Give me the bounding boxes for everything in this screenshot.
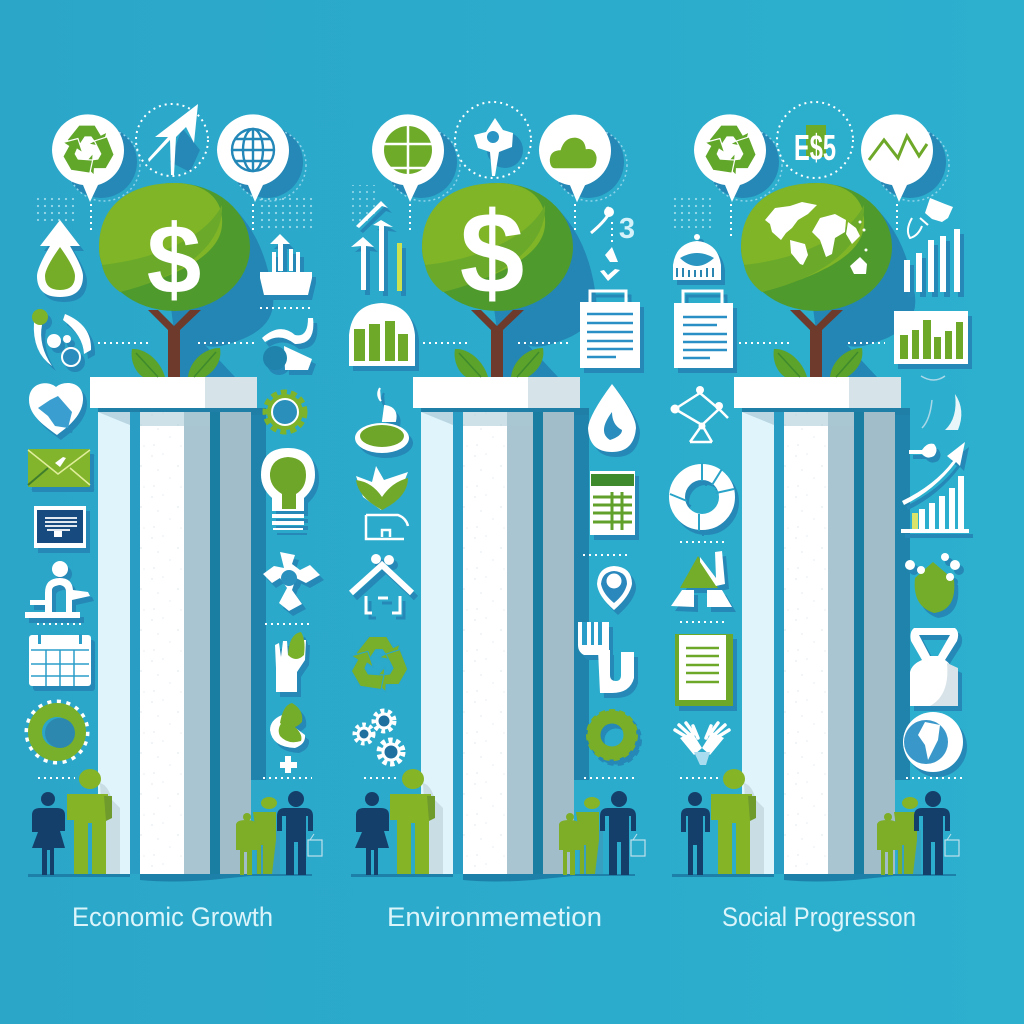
dotted texture xyxy=(352,185,378,225)
icon: dollar sign large: $ xyxy=(460,188,524,318)
icon: bars on tray xyxy=(260,234,312,295)
tree: economic growth xyxy=(99,183,273,377)
icon: recycle bubble xyxy=(694,114,766,202)
icon: document xyxy=(675,634,733,706)
icon: arrow in dashed circle xyxy=(136,104,208,176)
tree: environment xyxy=(422,183,596,377)
icon: person at desk xyxy=(25,561,90,618)
icon: heart globe xyxy=(29,383,83,435)
icon: recycle bubble xyxy=(52,114,124,202)
icon: donut segments xyxy=(670,463,734,531)
icon: gears cluster xyxy=(356,712,402,763)
icon: green bar chart card xyxy=(894,311,968,364)
icon: squiggle and number xyxy=(591,207,635,281)
icon: star cluster xyxy=(263,552,320,611)
icon: clipboard right xyxy=(580,291,640,368)
icon: globe xyxy=(903,712,963,772)
icon: plus xyxy=(280,756,297,773)
panel: social progress xyxy=(670,102,969,932)
dotted texture left xyxy=(33,193,75,221)
icon: squiggle and number: 3 xyxy=(619,213,635,245)
icon: triangles xyxy=(671,551,732,607)
heading: social progress: Social Progresson xyxy=(722,902,916,932)
icon: hand holding leaf xyxy=(275,632,306,692)
bubble shadows xyxy=(65,126,306,201)
icon: leafy gear xyxy=(27,702,87,762)
connector lines xyxy=(680,204,962,778)
tree: social progress xyxy=(741,183,915,377)
icon: house xyxy=(351,556,412,613)
bubble shadows xyxy=(707,126,949,201)
pillar: economic growth xyxy=(28,377,312,882)
icon: dollar sign: $ xyxy=(147,204,201,314)
bubble shadows xyxy=(385,126,627,201)
icon: money in dashed circle xyxy=(777,102,853,178)
icon: circular arrows and people xyxy=(32,309,91,366)
icon: green gear xyxy=(265,392,305,432)
icon: bowl with steam xyxy=(355,388,409,453)
icon: calendar xyxy=(29,634,91,686)
icon: green gear ring xyxy=(588,711,636,759)
icon: green recycle xyxy=(345,636,414,698)
icon: map pin xyxy=(597,566,632,610)
panel: economic growth xyxy=(25,104,322,932)
icon: flower in dashed circle xyxy=(455,102,531,178)
icon: leaf with flowers xyxy=(905,553,960,613)
icon: globe bubble xyxy=(217,114,289,202)
icon: monitor xyxy=(34,506,86,548)
icon: leaf book xyxy=(356,466,408,510)
icon: money in dashed circle: E$5 xyxy=(794,127,836,168)
people group left xyxy=(355,769,443,875)
icon: envelope xyxy=(28,449,90,487)
icon: leaf on white circle xyxy=(270,703,305,748)
dotted texture xyxy=(673,195,715,228)
icon: wave and speaker xyxy=(262,318,313,370)
icon: hands xyxy=(675,723,729,765)
heading: economic growth: Economic Growth xyxy=(72,902,273,932)
people group right xyxy=(236,791,322,875)
pillar: environment xyxy=(351,377,635,882)
icon: molecule network xyxy=(670,386,728,442)
icon: small frame xyxy=(366,515,408,539)
icon: zigzag bubble xyxy=(861,114,933,202)
icon: dome xyxy=(673,234,721,280)
icon: cloud bubble xyxy=(539,115,611,202)
icon: clipboard xyxy=(674,291,733,368)
people group left xyxy=(32,769,120,875)
icon: arrow and drop xyxy=(37,220,83,297)
people group right xyxy=(877,791,959,875)
icon: light bulb xyxy=(261,448,315,530)
icon: water drop xyxy=(588,384,636,452)
icon: world map on crown xyxy=(765,202,868,274)
icon: spreadsheet xyxy=(590,471,635,535)
icon: arch bar chart xyxy=(349,303,415,366)
icon: faint outline shape xyxy=(921,376,961,430)
panel: environment xyxy=(345,102,645,932)
icon: kettlebell xyxy=(910,628,958,706)
icon: rising arrow xyxy=(902,442,965,505)
connector lines xyxy=(364,204,634,778)
icon: rising bars with base xyxy=(901,476,969,533)
icon: fork and hook xyxy=(578,622,634,693)
icon: white bar chart xyxy=(904,229,960,292)
pillar: social progress xyxy=(672,377,956,882)
icon: rising arrows xyxy=(351,201,402,291)
people group left xyxy=(681,769,764,875)
icon: green globe bubble xyxy=(372,114,444,202)
connector lines xyxy=(37,204,313,778)
people group right xyxy=(559,791,645,875)
icon: splash blobs xyxy=(908,198,953,238)
heading: environment: Environmemetion xyxy=(387,902,602,932)
dotted texture right xyxy=(257,197,313,230)
